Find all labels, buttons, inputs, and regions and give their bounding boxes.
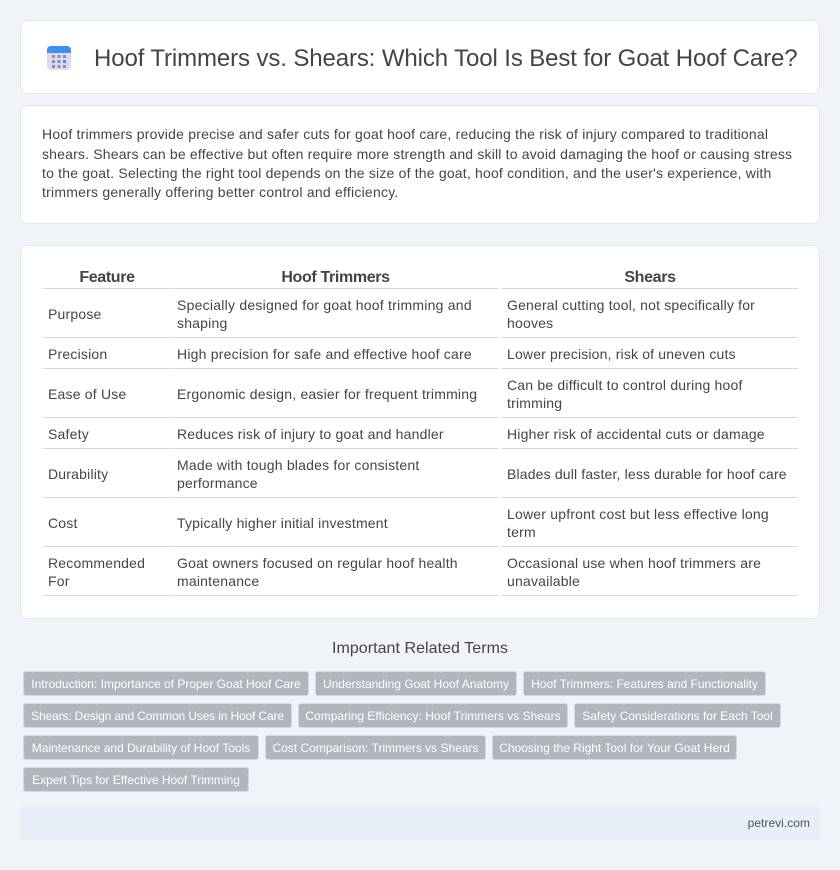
intro text [42, 126, 792, 200]
row: durability [43, 457, 798, 498]
row: ease of use: trimming [507, 395, 562, 411]
row: recommended for [43, 555, 798, 596]
tag [23, 767, 249, 792]
footer [20, 806, 820, 840]
table header: Hoof Trimmers [281, 269, 390, 286]
tag [523, 671, 766, 696]
tag [265, 735, 486, 760]
intro text: shears. Shears can be effective but often require more strength and skill to avoid damaging the hoof or causing stress [42, 146, 792, 162]
row: cost: Typically higher initial investment [177, 515, 388, 531]
row: purpose: Specially designed for goat hoof trimming and [177, 297, 472, 313]
row: ease of use [43, 377, 798, 418]
panel: header [20, 20, 820, 94]
intro text: to the goat. Selecting the right tool depends on the size of the goat, hoof condition, and the user's experience, with [42, 165, 771, 181]
footer link: petrevi.com [748, 816, 810, 830]
row: safety: Reduces risk of injury to goat and handler [177, 426, 444, 442]
tag [315, 671, 517, 696]
table header [43, 269, 798, 289]
row: durability: Made with tough blades for consistent [177, 457, 419, 473]
row: cost: Cost [48, 515, 78, 531]
tag: Understanding Goat Hoof Anatomy [323, 677, 509, 691]
tag [492, 735, 737, 760]
row: precision: High precision for safe and effective hoof care [177, 346, 472, 362]
tag: Maintenance and Durability of Hoof Tools [32, 741, 250, 755]
row: cost [43, 506, 798, 547]
tag: Hoof Trimmers: Features and Functionality [531, 677, 758, 691]
row: precision: Lower precision, risk of uneven cuts [507, 346, 736, 362]
row: durability: performance [177, 475, 258, 491]
row: purpose: shaping [177, 315, 227, 331]
row: purpose [43, 297, 798, 338]
row: recommended for: Goat owners focused on regular hoof health [177, 555, 458, 571]
panel: comparison table [20, 245, 820, 619]
row: precision [43, 346, 798, 369]
tag [574, 703, 781, 728]
row: cost: term [507, 524, 536, 540]
heading: related terms: Important Related Terms [332, 640, 508, 657]
tag [23, 671, 309, 696]
row: purpose: Purpose [48, 306, 102, 322]
row: purpose: hooves [507, 315, 553, 331]
row: purpose: General cutting tool, not specifically for [507, 297, 755, 313]
tag: Safety Considerations for Each Tool [582, 709, 773, 723]
tag list [23, 671, 781, 792]
panel: introduction [20, 105, 820, 224]
row: recommended for: unavailable [507, 573, 580, 589]
row: safety: Safety [48, 426, 89, 442]
intro text: trimmers generally offering better control and efficiency. [42, 184, 399, 200]
row: safety [43, 426, 798, 449]
row: recommended for: maintenance [177, 573, 259, 589]
table header: Shears [624, 269, 676, 286]
row: durability: Blades dull faster, less durable for hoof care [507, 466, 787, 482]
tag: Expert Tips for Effective Hoof Trimming [32, 773, 240, 787]
row: durability: Durability [48, 466, 108, 482]
tag [23, 735, 259, 760]
row: precision: Precision [48, 346, 107, 362]
row: safety: Higher risk of accidental cuts or damage [507, 426, 765, 442]
table header: Feature [79, 269, 135, 286]
row: cost: Lower upfront cost but less effective long [507, 506, 769, 522]
row: recommended for: For [48, 573, 70, 589]
tag: Cost Comparison: Trimmers vs Shears [272, 741, 479, 755]
row: ease of use: Ease of Use [48, 386, 126, 402]
tag: Comparing Efficiency: Hoof Trimmers vs Shears [305, 709, 561, 723]
tag [23, 703, 292, 728]
intro text: Hoof trimmers provide precise and safer cuts for goat hoof care, reducing the risk of injury compared to traditional [42, 126, 768, 142]
row: recommended for: Occasional use when hoof trimmers are [507, 555, 761, 571]
tag: Shears: Design and Common Uses in Hoof Care [31, 709, 284, 723]
title: Hoof Trimmers vs. Shears: Which Tool Is Best for Goat Hoof Care? [94, 45, 797, 72]
row: ease of use: Can be difficult to control during hoof [507, 377, 743, 393]
tag: Introduction: Importance of Proper Goat Hoof Care [31, 677, 301, 691]
row: ease of use: Ergonomic design, easier for frequent trimming [177, 386, 477, 402]
tag [298, 703, 568, 728]
tag: Choosing the Right Tool for Your Goat Herd [499, 741, 730, 755]
icon: calendar [47, 46, 71, 70]
row: recommended for: Recommended [48, 555, 145, 571]
